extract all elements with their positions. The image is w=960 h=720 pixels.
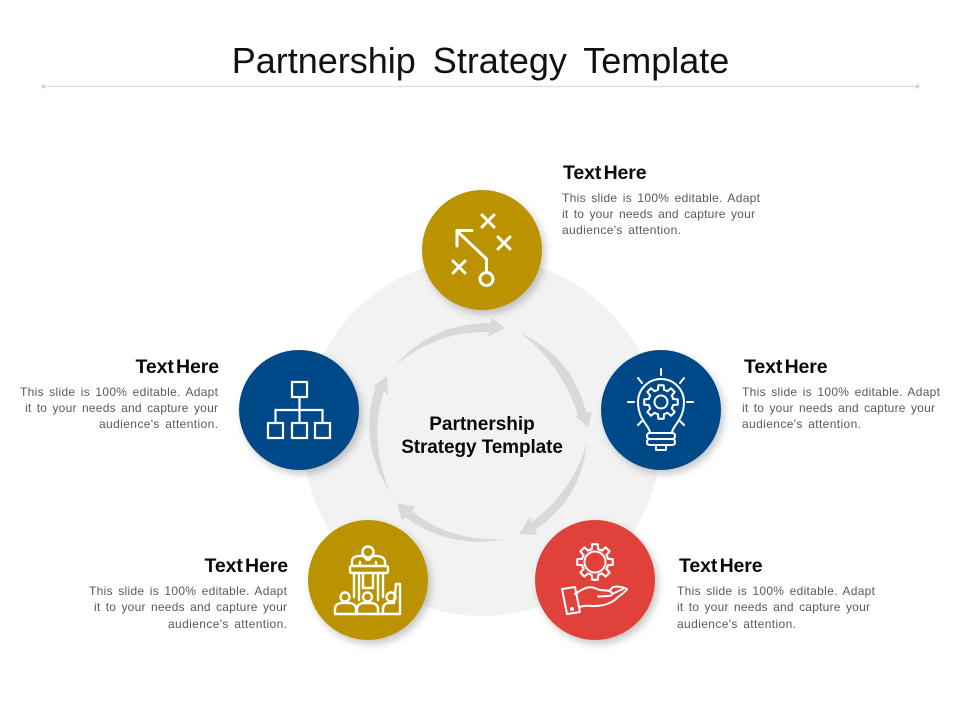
label: top: Text Here <box>563 162 647 184</box>
label: left: This slide is 100% editable. Adapt <box>20 385 219 399</box>
node: lower right red circle with hand and gear icon <box>535 520 655 640</box>
node: lower left gold circle with podium icon <box>308 520 428 640</box>
icon: play diagram <box>453 215 510 286</box>
center label: Partnership <box>429 414 535 435</box>
label: lower right: it to your needs and capture your <box>677 600 870 614</box>
title: Partnership Strategy Template <box>232 40 729 81</box>
label: lower left: audience's attention. <box>168 617 287 631</box>
label: left: audience's attention. <box>99 417 218 431</box>
label: top: This slide is 100% editable. Adapt <box>562 191 761 205</box>
title divider <box>42 84 920 88</box>
label: top <box>562 162 761 237</box>
label: left: Text Here <box>135 356 219 378</box>
label: lower left: Text Here <box>204 555 288 577</box>
background circle <box>303 258 661 616</box>
label: right: audience's attention. <box>742 417 861 431</box>
icon: hand holding gear <box>562 544 627 614</box>
label: right: This slide is 100% editable. Adapt <box>742 385 941 399</box>
icon: speaker at podium with audience <box>335 546 400 614</box>
node: top gold circle with play diagram icon <box>422 190 542 310</box>
label: lower right: Text Here <box>679 555 763 577</box>
label: right: Text Here <box>744 356 828 378</box>
arrow: top to right <box>520 333 592 427</box>
center label: Strategy Template <box>401 437 563 458</box>
center label <box>401 414 563 458</box>
icon: org chart <box>268 382 330 438</box>
node: left blue circle with org chart icon <box>239 350 359 470</box>
label: lower left: This slide is 100% editable. Adapt <box>89 584 288 598</box>
node: right blue circle with lightbulb icon <box>601 350 721 470</box>
label: lower right <box>677 555 876 631</box>
label: lower left <box>89 555 288 631</box>
label: top: it to your needs and capture your <box>562 207 755 221</box>
arrow: right to lower right <box>519 442 587 535</box>
label: right: it to your needs and capture your <box>742 401 935 415</box>
label: left: it to your needs and capture your <box>25 401 218 415</box>
label: lower right: audience's attention. <box>677 617 796 631</box>
label: right <box>742 356 941 431</box>
arrow: left to top <box>395 318 505 366</box>
label: lower right: This slide is 100% editable. Adapt <box>677 584 876 598</box>
label: top: audience's attention. <box>562 223 681 237</box>
icon: lightbulb with gear <box>628 369 693 450</box>
label: left <box>20 356 219 431</box>
arrow: lower left to left <box>369 376 390 492</box>
arrow: lower right to lower left <box>397 503 505 542</box>
cycle arrows <box>369 318 592 542</box>
label: lower left: it to your needs and capture your <box>94 600 287 614</box>
